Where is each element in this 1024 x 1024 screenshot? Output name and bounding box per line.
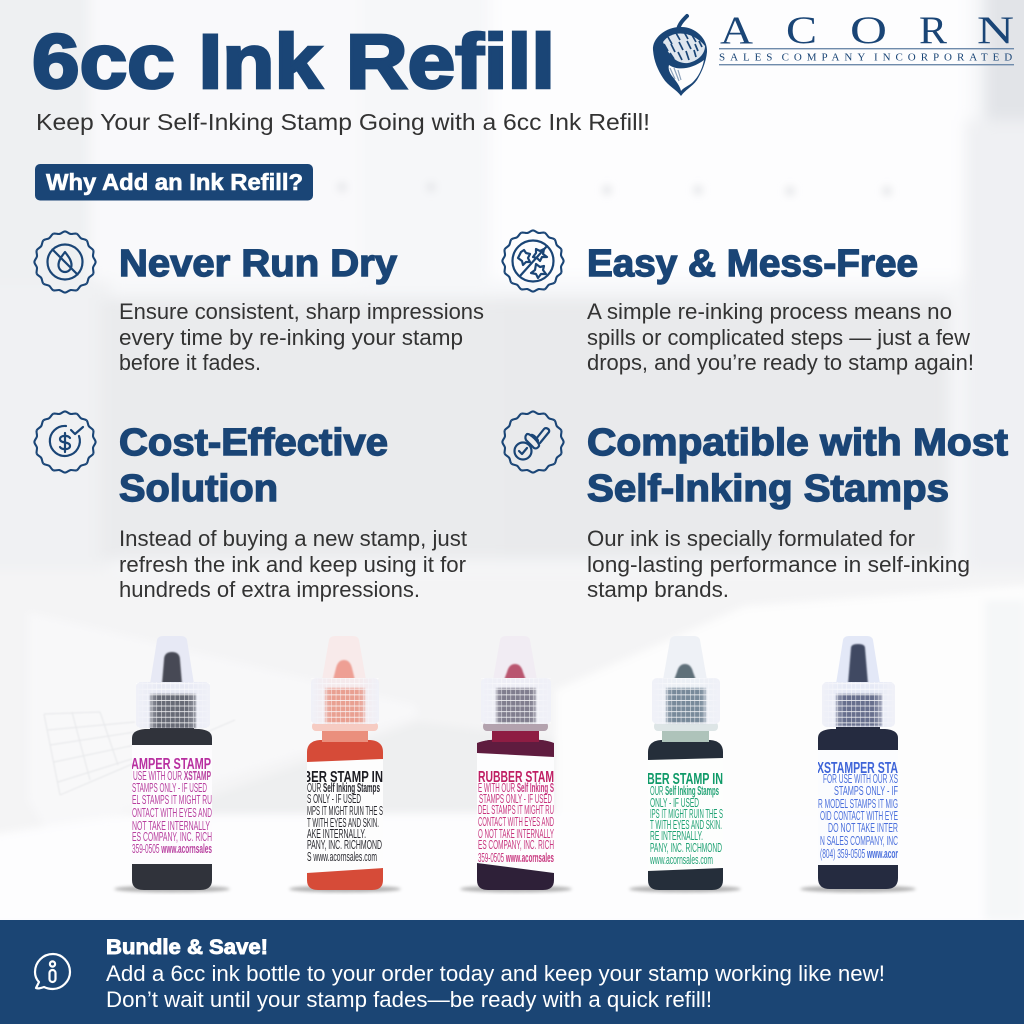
bottle: green ink: www.acornsales.com	[649, 853, 713, 867]
banner text	[106, 961, 885, 1012]
bottle: blue ink: FOR USE WITH OUR XS	[823, 772, 898, 786]
body text: drops, and you’re ready to stamp again!	[587, 350, 974, 375]
bottle: purple ink: USE WITH OUR XSTAMP	[133, 769, 211, 783]
bottle: purple ink: EL STAMPS IT MIGHT RU	[132, 793, 212, 807]
body text: hundreds of extra impressions.	[119, 577, 420, 602]
bottle: purple ink: 359-0505 www.acornsales	[132, 842, 212, 856]
bottle: green ink: BER STAMP IN	[647, 771, 723, 788]
bottle: blue ink: OID CONTACT WITH EYE	[820, 809, 898, 823]
bottle: pink ink	[460, 636, 572, 892]
bottle: red ink	[289, 636, 401, 892]
bottle: blue ink: (804) 359-0505 www.acor	[820, 847, 898, 861]
body text: Our ink is specially formulated for	[587, 526, 915, 551]
body text: stamp brands.	[587, 577, 729, 602]
banner text: Don’t wait until your stamp fades—be ready with a quick refill!	[106, 987, 712, 1012]
bottle: blue ink: DO NOT TAKE INTER	[828, 821, 898, 835]
banner heading: Bundle & Save!	[106, 936, 268, 959]
heading: Cost-Effective	[119, 422, 388, 464]
body text: Instead of buying a new stamp, just	[119, 526, 467, 551]
subtitle: Keep Your Self-Inking Stamp Going with a 6cc Ink Refill!	[36, 109, 650, 135]
bottle: pink ink: O NOT TAKE INTERNALLY	[478, 827, 554, 841]
heading: Self-Inking Stamps	[587, 468, 949, 510]
bottle: blue ink	[800, 636, 916, 892]
bottle: green ink: PANY, INC. RICHMOND	[650, 841, 722, 855]
logo wordmark: N	[977, 9, 1014, 52]
bottle: purple ink	[114, 636, 230, 892]
bottle: blue ink: XSTAMPER STA	[817, 760, 898, 777]
body text: before it fades.	[119, 350, 261, 375]
body text: refresh the ink and keep using it for	[119, 552, 466, 577]
heading: Solution	[119, 468, 278, 510]
product row: five ink bottles	[114, 636, 916, 892]
icon: stamp	[500, 409, 566, 475]
body text: A simple re-inking process means no	[587, 299, 952, 324]
body text: spills or complicated steps — just a few	[587, 325, 970, 350]
logo: Acorn Sales Company	[653, 9, 1017, 96]
bottle: purple ink: ONTACT WITH EYES AND	[132, 806, 212, 820]
icon: info speech bubble	[35, 954, 70, 989]
body text	[587, 299, 974, 375]
icon: acorn	[653, 16, 707, 96]
body text: every time by re-inking your stamp	[119, 325, 463, 350]
bottle: pink ink: DEL STAMPS IT MIGHT RU	[478, 803, 554, 817]
bottle: green ink: ONLY - IF USED	[650, 796, 699, 810]
body text	[587, 526, 970, 602]
section tag: Why Add an Ink Refill?	[35, 164, 313, 200]
logo wordmark: R	[919, 9, 947, 52]
body text	[119, 526, 467, 602]
bottle: pink ink: RUBBER STAM	[478, 769, 554, 786]
bottle: pink ink: 359-0505 www.acornsales	[478, 851, 554, 865]
bottle: red ink: S ONLY - IF USED	[307, 792, 361, 806]
bottle: red ink: T WITH EYES AND SKIN.	[307, 816, 379, 830]
section tag: Why Add an Ink Refill?: Why Add an Ink Refill?	[46, 169, 303, 195]
body text	[119, 299, 484, 375]
logo wordmark: C	[786, 9, 817, 52]
heading	[587, 422, 1008, 510]
logo wordmark: SALES COMPANY INCORPORATED	[719, 52, 1017, 64]
title: 6cc Ink Refill	[32, 19, 555, 105]
bottle: blue ink: R MODEL STAMPS IT MIG	[818, 797, 898, 811]
heading	[119, 422, 388, 510]
footer banner: Bundle & Save	[0, 920, 1024, 1024]
panel: Easy & Mess-Free	[500, 228, 974, 375]
icon: dollar with check	[32, 409, 98, 475]
heading: Never Run Dry	[119, 243, 397, 285]
panel: Cost-Effective Solution	[32, 409, 467, 602]
bottle: green ink	[629, 636, 741, 892]
panel: Compatible with Most Self-Inking Stamps	[500, 409, 1008, 602]
body text: long-lasting performance in self-inking	[587, 552, 970, 577]
bottle: green ink: OUR Self Inking Stamps	[650, 784, 719, 798]
bottle: purple ink: NOT TAKE INTERNALLY	[132, 819, 210, 833]
logo wordmark: A	[720, 9, 753, 52]
bottle: pink ink: ES COMPANY, INC. RICH	[478, 838, 554, 852]
bottle: pink ink: STAMPS ONLY - IF USED	[479, 792, 552, 806]
heading: Compatible with Most	[587, 422, 1008, 464]
bottle: blue ink: STAMPS ONLY - IF	[834, 784, 898, 798]
bottle: blue ink: N SALES COMPANY, INC	[820, 834, 898, 848]
icon: crossed-out drop	[32, 229, 98, 295]
logo wordmark	[719, 9, 1017, 65]
bottle: purple ink: ES COMPANY, INC. RICH	[132, 830, 212, 844]
bottle: pink ink: E WITH OUR Self Inking S	[478, 781, 554, 795]
bottle: green ink: RE INTERNALLY.	[650, 829, 703, 843]
bottle: red ink: AKE INTERNALLY.	[307, 827, 366, 841]
bottle: red ink: S www.acornsales.com	[307, 850, 377, 864]
bottle: green ink: T WITH EYES AND SKIN.	[650, 818, 722, 832]
icon: splats	[500, 228, 566, 294]
bottle: red ink: PANY, INC. RICHMOND	[307, 838, 382, 852]
bottle: pink ink: CONTACT WITH EYES AND	[478, 815, 554, 829]
bottle: purple ink: AMPER STAMP	[131, 756, 211, 773]
bottle: purple ink: STAMPS ONLY - IF USED	[132, 781, 207, 795]
bottle: red ink: MPS IT MIGHT RUIN THE S	[307, 804, 383, 818]
heading: Easy & Mess-Free	[587, 243, 918, 285]
panel: Never Run Dry	[32, 229, 484, 375]
banner text: Add a 6cc ink bottle to your order today and keep your stamp working like new!	[106, 961, 885, 986]
logo wordmark: O	[850, 9, 887, 52]
bottle: red ink: BER STAMP IN	[303, 769, 383, 786]
bottle: red ink: OUR Self Inking Stamps	[307, 781, 380, 795]
body text: Ensure consistent, sharp impressions	[119, 299, 484, 324]
bottle: green ink: IPS IT MIGHT RUIN THE S	[650, 807, 723, 821]
